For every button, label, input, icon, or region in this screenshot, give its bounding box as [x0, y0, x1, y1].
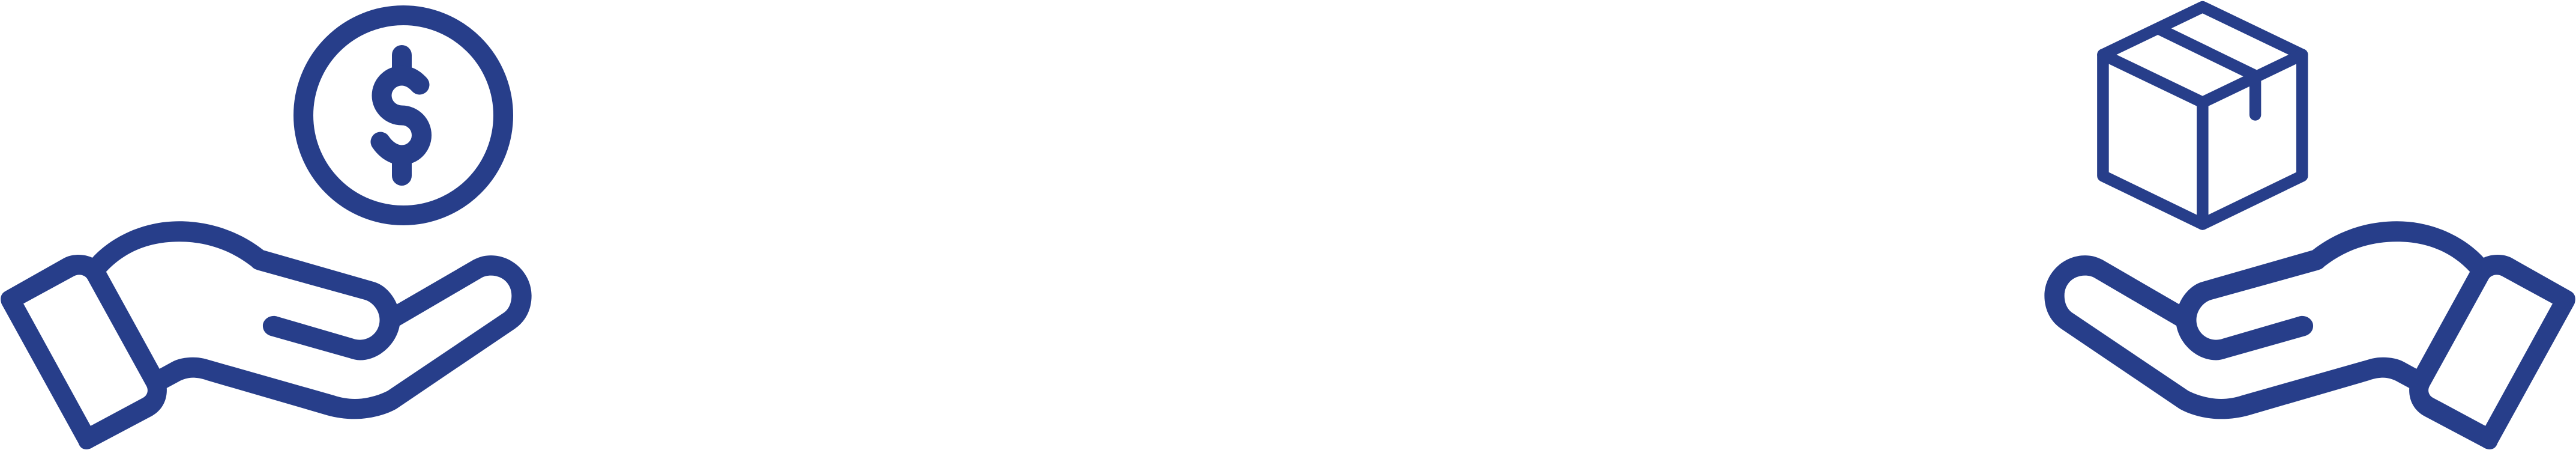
icon: hand holding coin	[1, 16, 532, 449]
icon: open hand right	[2044, 221, 2575, 449]
icon: hand holding box	[2044, 7, 2575, 449]
icon: cardboard box	[2103, 7, 2302, 224]
icon: coin with dollar sign	[304, 16, 503, 215]
icon: open hand left	[1, 221, 532, 449]
